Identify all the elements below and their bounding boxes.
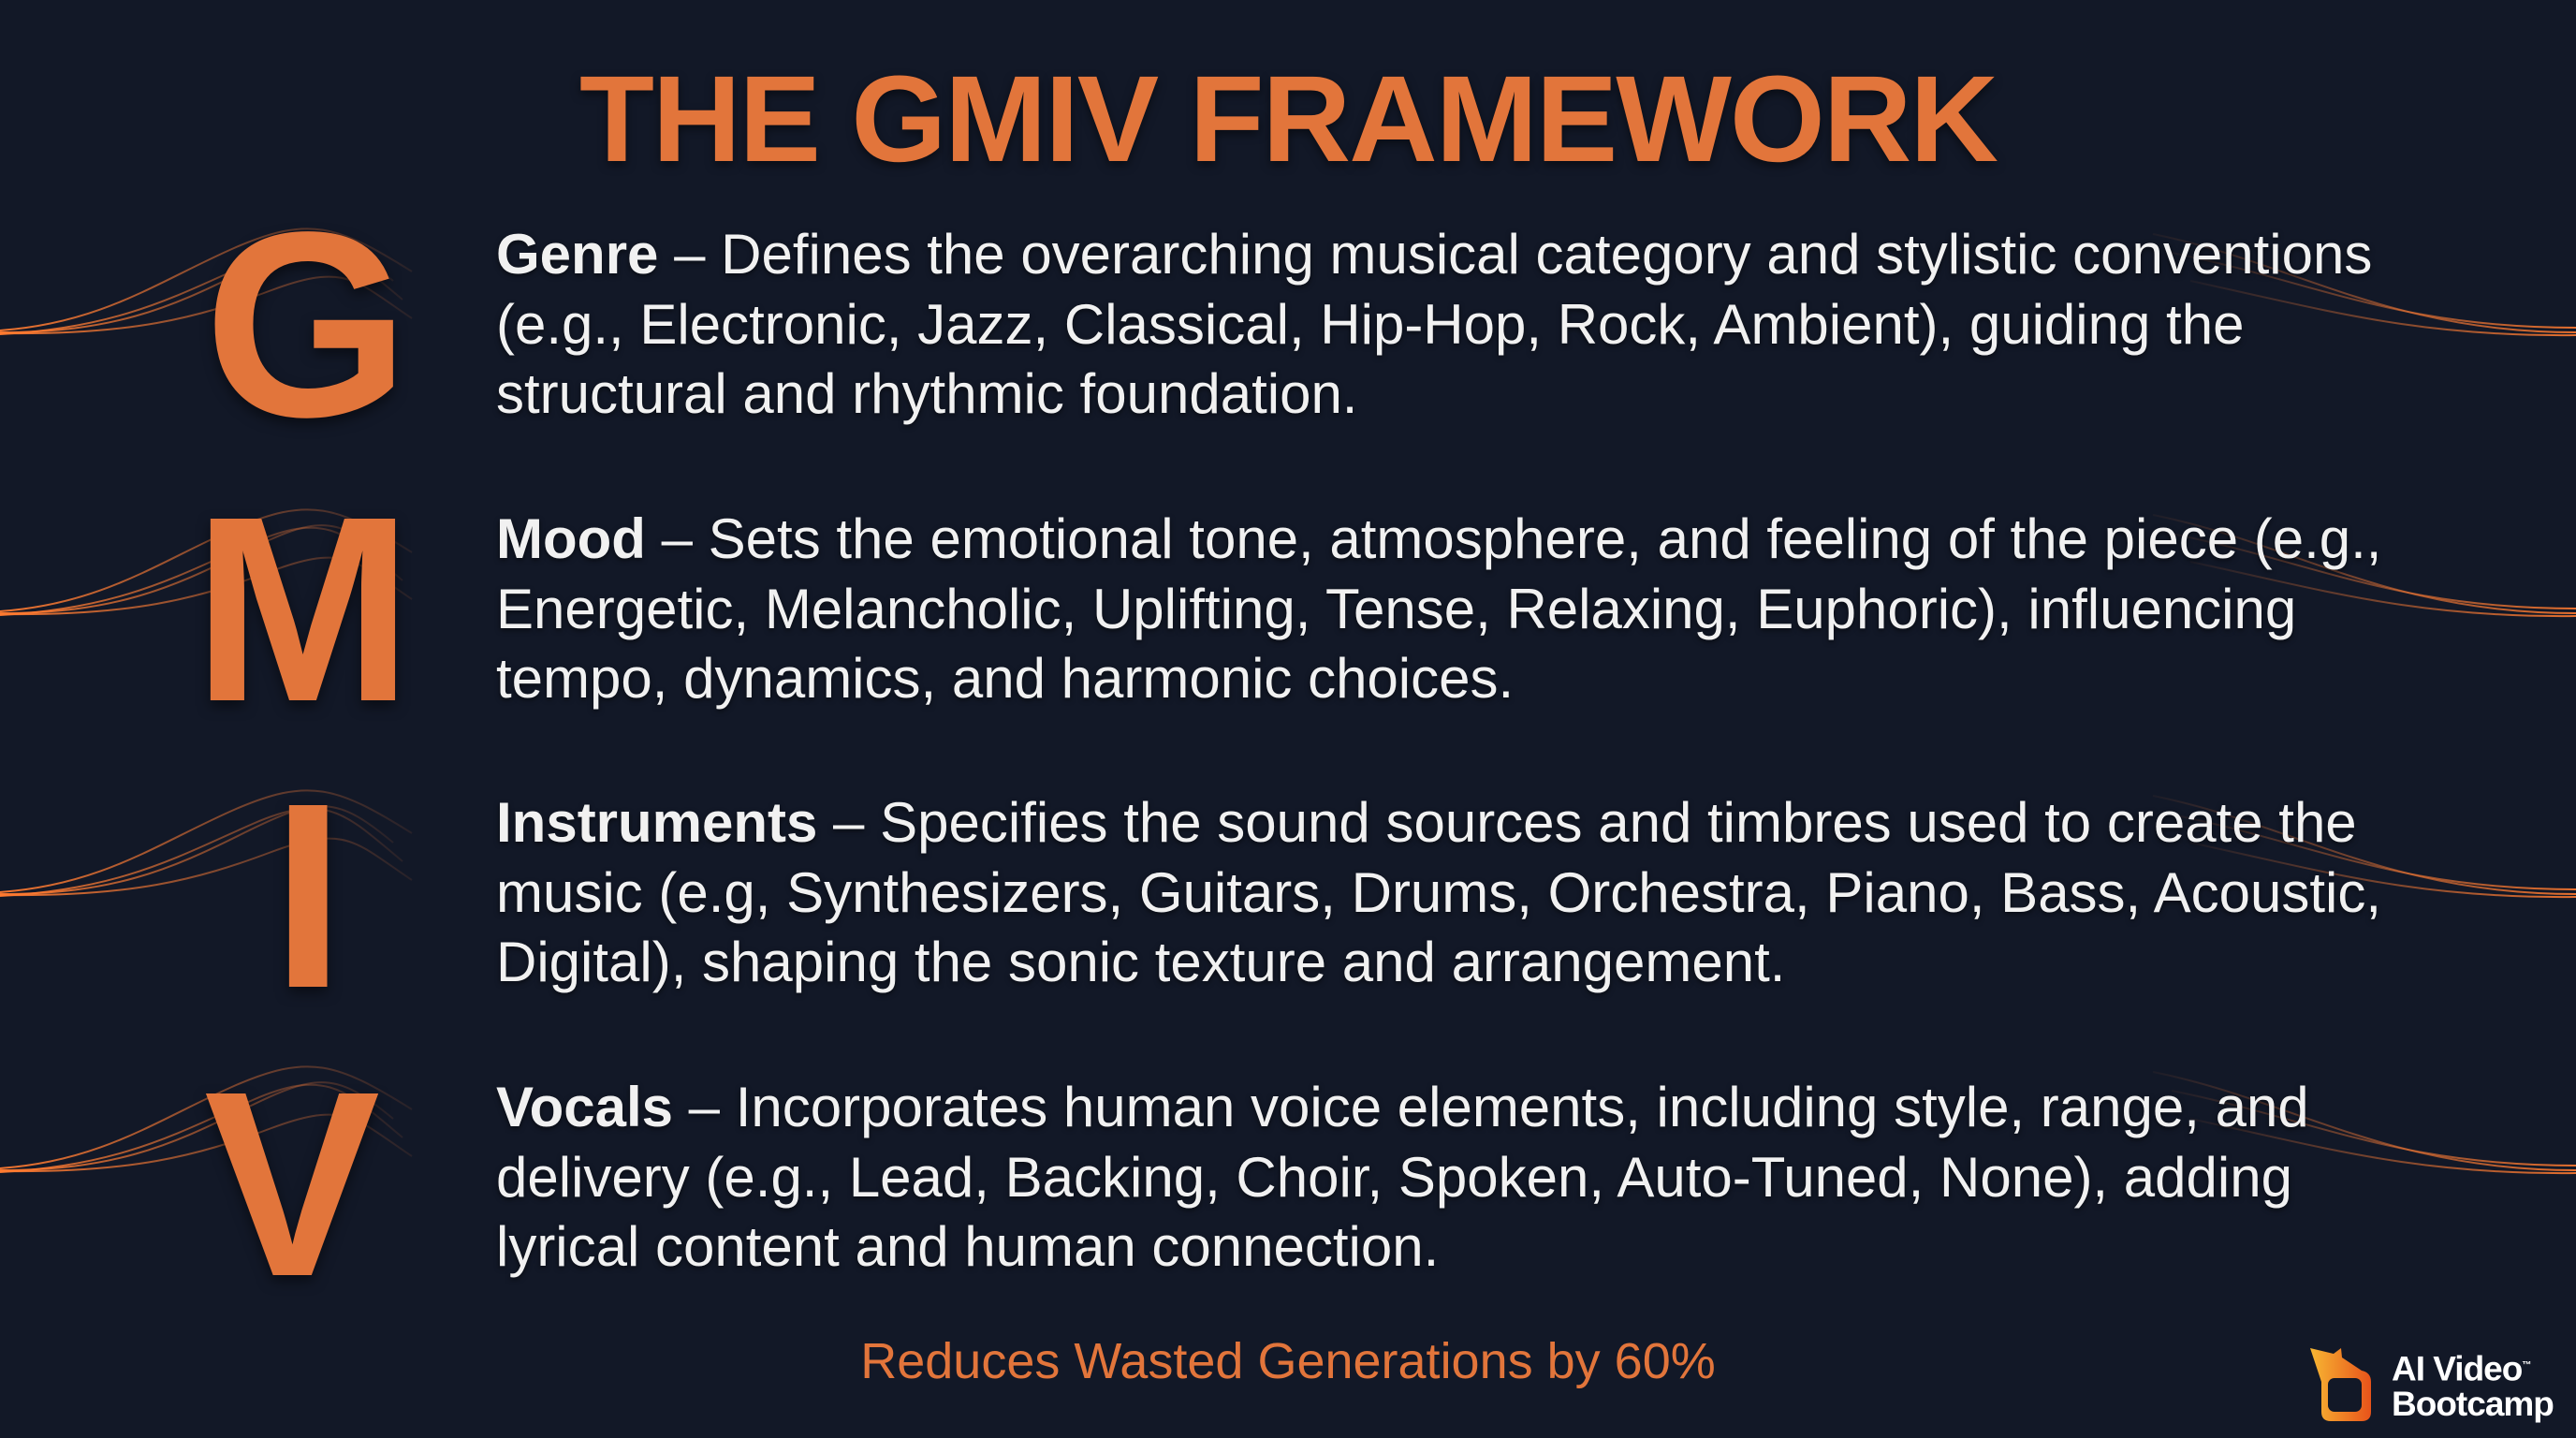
text: genre: structural and rhythmic foundation. [496, 362, 1357, 425]
text: vocals: Vocals – Incorporates human voice elements, including style, range, and [496, 1076, 2309, 1138]
logo text: AI Video™ [2392, 1349, 2530, 1387]
text: instruments: Instruments – Specifies the sound sources and timbres used to create the [496, 791, 2357, 854]
text: instruments: music (e.g, Synthesizers, Guitars, Drums, Orchestra, Piano, Bass, Acoustic, [496, 861, 2381, 923]
tagline: Reduces Wasted Generations by 60% [860, 1333, 1716, 1389]
text: genre: Genre – Defines the overarching musical category and stylistic conventions [496, 223, 2372, 286]
icon: logo mark [2310, 1348, 2371, 1421]
logo text [2392, 1349, 2554, 1423]
text: mood: tempo, dynamics, and harmonic choices. [496, 647, 1514, 710]
text: genre [496, 223, 2372, 427]
text: vocals: lyrical content and human connection. [496, 1215, 1439, 1278]
text: genre: (e.g., Electronic, Jazz, Classical, Hip-Hop, Rock, Ambient), guiding the [496, 292, 2244, 356]
letter M: M [193, 462, 413, 756]
letter I: I [271, 748, 344, 1043]
text: mood: Mood – Sets the emotional tone, atmosphere, and feeling of the piece (e.g., [496, 507, 2381, 570]
text: mood [496, 507, 2381, 712]
text: instruments: Digital), shaping the sonic texture and arrangement. [496, 931, 1785, 993]
letter V: V [204, 1036, 380, 1331]
text: mood: Energetic, Melancholic, Uplifting, Tense, Relaxing, Euphoric), influencing [496, 577, 2296, 640]
text: instruments [496, 791, 2381, 996]
logo text: Bootcamp [2392, 1385, 2554, 1423]
title: THE GMIV FRAMEWORK [579, 50, 1997, 187]
text: vocals [496, 1076, 2309, 1280]
text: vocals: delivery (e.g., Lead, Backing, Choir, Spoken, Auto-Tuned, None), adding [496, 1146, 2292, 1208]
logo [2310, 1348, 2554, 1423]
letter G: G [204, 177, 409, 472]
